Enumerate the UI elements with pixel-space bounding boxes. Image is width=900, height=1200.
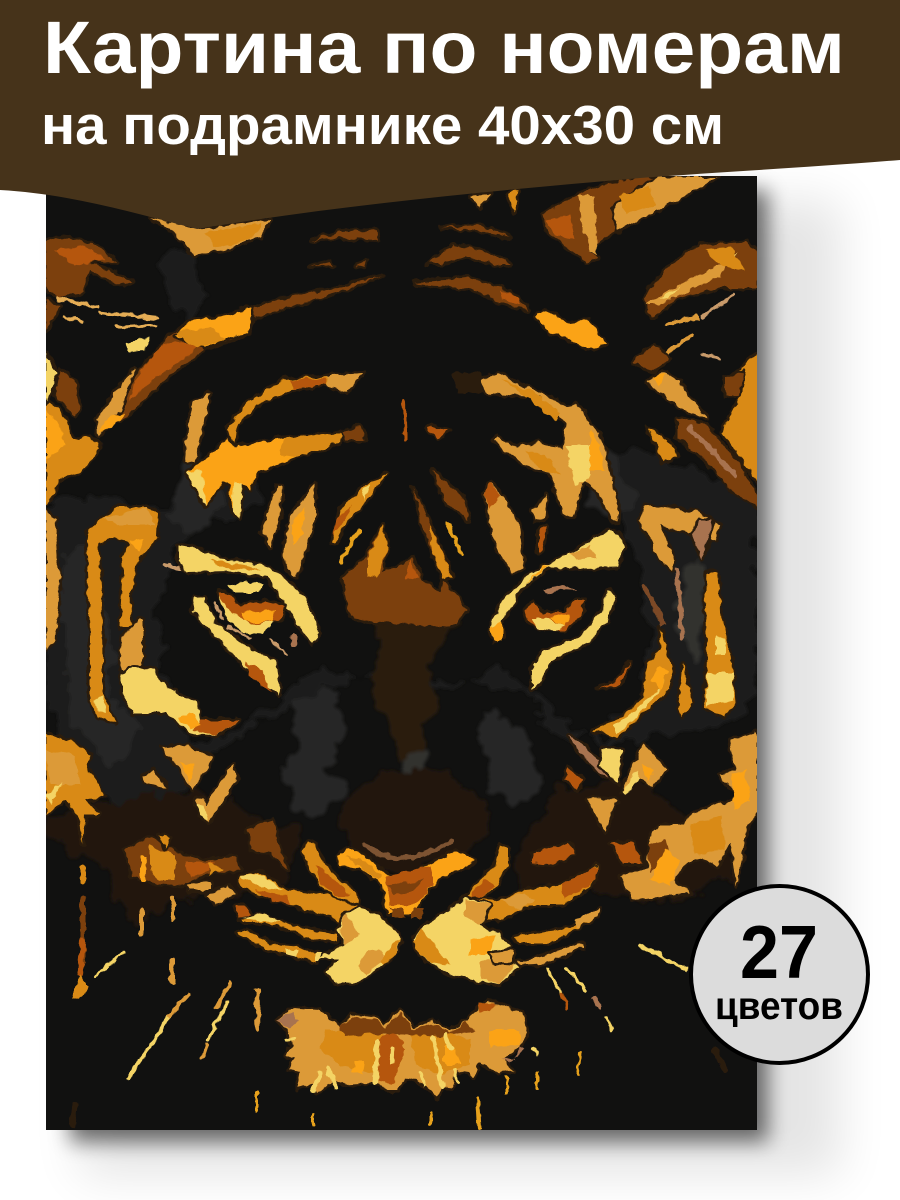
left eye: [165, 545, 320, 695]
chin beard: [278, 1000, 527, 1098]
right eye: [490, 530, 630, 690]
dark fur shading: [46, 250, 757, 925]
title: Картина по номерам: [43, 6, 845, 89]
canvas shadow: [70, 190, 840, 1175]
canvas painting: tiger: [45, 176, 758, 1130]
badge: 27 colours: [691, 886, 868, 1063]
brow stripes: [185, 373, 618, 627]
badge: 27 colours: цветов: [715, 985, 843, 1028]
nose and mouth: [303, 840, 508, 918]
subtitle: на подрамнике 40х30 см: [41, 94, 724, 156]
whisker pads: [237, 865, 600, 985]
header banner: [0, 0, 900, 229]
right cheek stripes: [533, 505, 757, 900]
left cheek stripes: [46, 507, 240, 845]
ears and top fur: [45, 177, 717, 505]
badge: 27 colours: 27: [740, 910, 818, 994]
left muzzle fur: [125, 820, 288, 920]
right ear: [633, 242, 758, 508]
paint drips and whiskers: [72, 868, 725, 1128]
